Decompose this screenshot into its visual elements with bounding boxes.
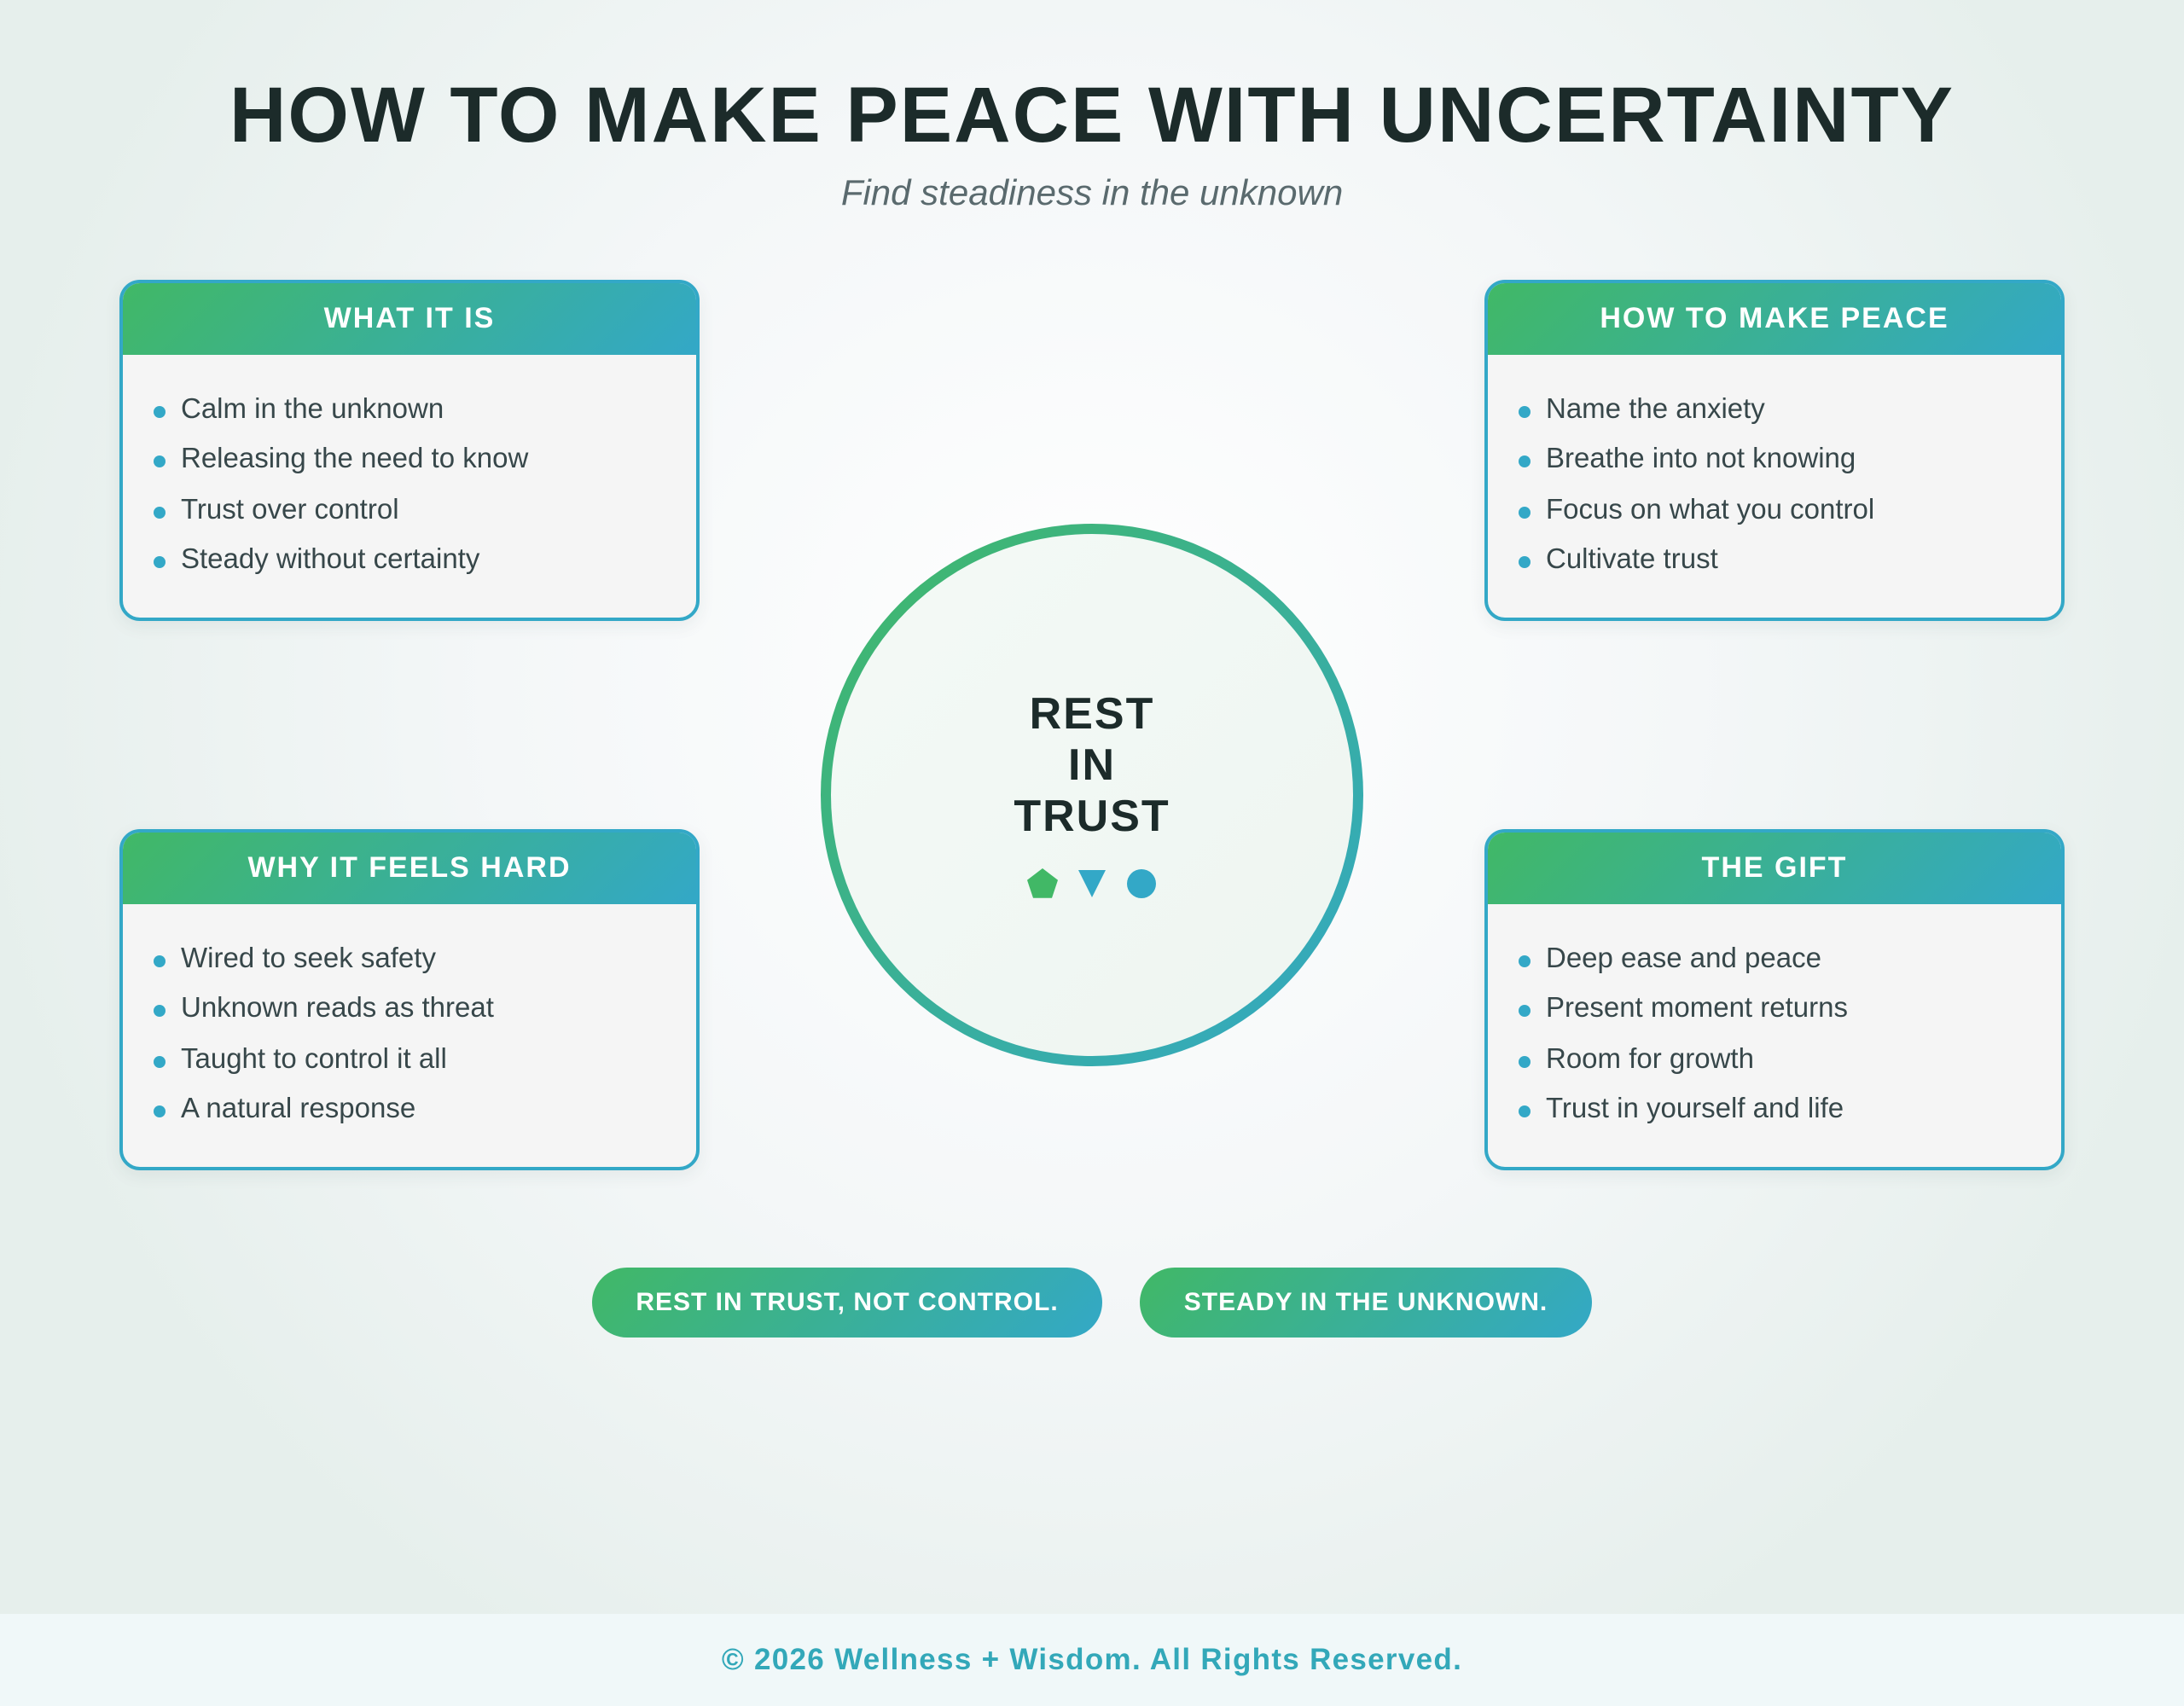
center circle: [821, 524, 1363, 1066]
footer: © 2026 Wellness + Wisdom. All Rights Reserved.: [722, 1643, 1462, 1676]
center text: IN: [1068, 740, 1116, 790]
panel: the gift: [1484, 829, 2065, 1170]
heading: how to make peace: HOW TO MAKE PEACE: [1600, 302, 1949, 334]
panel: why it feels hard: [119, 829, 700, 1170]
center text: TRUST: [1014, 792, 1170, 841]
panel: the gift: Present moment returns: [1546, 991, 1848, 1023]
panel: what it is: Calm in the unknown: [181, 392, 444, 424]
heading: what it is: WHAT IT IS: [324, 302, 495, 334]
panel: why it feels hard: Taught to control it all: [181, 1042, 447, 1074]
panel: how to make peace: Cultivate trust: [1546, 543, 1718, 574]
list: what it is: [154, 392, 529, 574]
center text: [1014, 689, 1170, 841]
panel: what it is: [119, 280, 700, 621]
pill: steady in the unknown: STEADY IN THE UNKNOWN.: [1184, 1288, 1548, 1316]
pill: rest in trust: REST IN TRUST, NOT CONTROL.: [636, 1288, 1059, 1316]
panel: why it feels hard: A natural response: [181, 1092, 415, 1123]
heading: why it feels hard: [123, 833, 696, 904]
heading: how to make peace: [1488, 283, 2061, 355]
pill: rest in trust: [592, 1268, 1102, 1338]
panel: how to make peace: [1484, 280, 2065, 621]
list: the gift: [1519, 942, 1848, 1123]
panel: what it is: Trust over control: [181, 493, 399, 525]
list: why it feels hard: [154, 942, 494, 1123]
heading: why it feels hard: WHY IT FEELS HARD: [247, 851, 572, 884]
panel: the gift: Deep ease and peace: [1546, 942, 1821, 973]
heading: what it is: [123, 283, 696, 355]
icon: pentagon, triangle, circle: [1027, 868, 1156, 898]
list: how to make peace: [1519, 392, 1874, 574]
center text: REST: [1030, 689, 1154, 739]
footer: [0, 1614, 2184, 1706]
panel: the gift: Room for growth: [1546, 1042, 1754, 1074]
panel: how to make peace: Name the anxiety: [1546, 392, 1765, 424]
subtitle: Find steadiness in the unknown: [841, 172, 1343, 212]
pill: steady in the unknown: [1140, 1268, 1592, 1338]
panel: what it is: Steady without certainty: [181, 543, 479, 574]
panel: the gift: Trust in yourself and life: [1546, 1092, 1844, 1123]
heading: the gift: THE GIFT: [1702, 851, 1847, 884]
panel: why it feels hard: Unknown reads as threat: [181, 991, 494, 1023]
panel: how to make peace: Breathe into not knowing: [1546, 442, 1856, 473]
panel: why it feels hard: Wired to seek safety: [181, 942, 436, 973]
title: HOW TO MAKE PEACE WITH UNCERTAINTY: [229, 72, 1955, 159]
heading: the gift: [1488, 833, 2061, 904]
panel: how to make peace: Focus on what you control: [1546, 493, 1874, 525]
panel: what it is: Releasing the need to know: [181, 442, 528, 473]
